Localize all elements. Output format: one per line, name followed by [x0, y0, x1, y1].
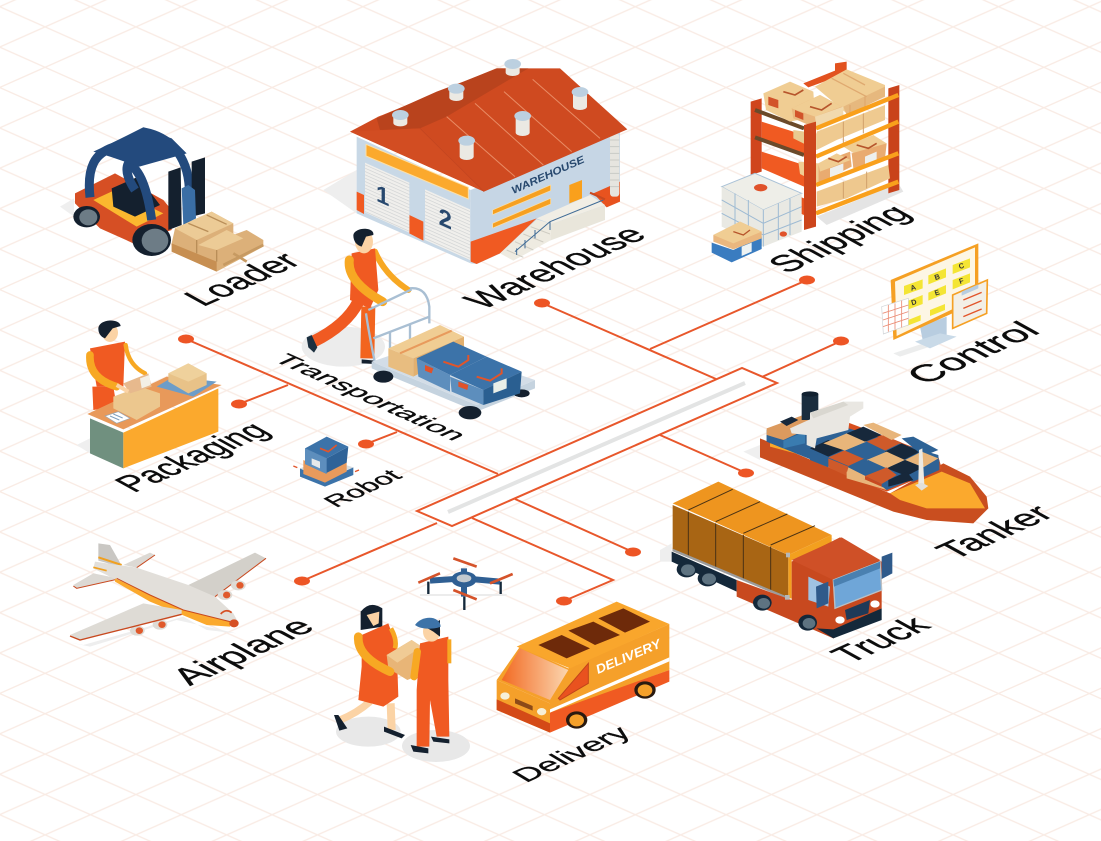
label: Tanker: Tanker	[927, 500, 1063, 564]
icon: delivery van	[497, 602, 669, 733]
label: Control: Control	[897, 317, 1049, 389]
icon: drone	[418, 558, 513, 610]
connector: tanker	[660, 435, 746, 473]
label: Truck: Truck	[822, 612, 940, 668]
icon: airplane	[65, 543, 266, 647]
icon: warehouse: WAREHOUSE	[510, 154, 588, 197]
icon: warehouse: 1	[376, 180, 389, 212]
label: Transportation: Transportation	[266, 351, 473, 444]
connector: robot branch	[366, 432, 397, 444]
monitor cells: E	[933, 287, 941, 298]
icon: courier handing parcel to customer	[334, 605, 470, 762]
icon: container ship	[743, 391, 988, 523]
label: Robot: Robot	[317, 466, 408, 511]
icon: control monitor	[882, 243, 987, 357]
connector: packaging and transportation trunk	[186, 339, 498, 474]
connector end dots	[178, 276, 849, 606]
connector: shipping	[650, 280, 807, 349]
icon: packaging desk with worker	[77, 321, 222, 468]
monitor cells: F	[958, 276, 965, 286]
icon: warehouse robot	[293, 437, 359, 487]
monitor cells: C	[957, 261, 966, 271]
central hub	[417, 368, 777, 526]
label: Loader: Loader	[175, 248, 310, 311]
monitor cells: B	[933, 272, 941, 282]
monitor cells: D	[910, 297, 918, 307]
monitor cells: A	[909, 282, 918, 293]
connector network	[178, 276, 849, 606]
icon: delivery van: DELIVERY	[594, 636, 665, 677]
connector: packaging branch	[239, 385, 288, 404]
ship containers	[767, 415, 939, 490]
monitor cells	[904, 258, 970, 326]
icon: worker pushing cart	[302, 229, 535, 419]
icon: warehouse: 2	[439, 203, 452, 236]
icon: forklift loader	[60, 128, 263, 272]
connector: delivery	[472, 518, 613, 601]
lower shelf boxes	[793, 105, 890, 207]
label: Packaging: Packaging	[106, 417, 279, 497]
icon: warehouse	[323, 59, 627, 264]
roof vents	[392, 59, 588, 160]
connector: warehouse	[542, 303, 716, 379]
label: Shipping: Shipping	[759, 200, 921, 278]
icon: storage shelves	[712, 62, 903, 262]
top shelf boxes	[763, 69, 885, 128]
label: Airplane: Airplane	[162, 613, 324, 690]
connector: control	[762, 341, 841, 377]
icon: truck	[660, 482, 892, 638]
connector: truck	[515, 499, 633, 552]
label: Warehouse: Warehouse	[455, 221, 656, 314]
connector: airplane	[302, 523, 437, 581]
label: Delivery: Delivery	[505, 722, 639, 786]
